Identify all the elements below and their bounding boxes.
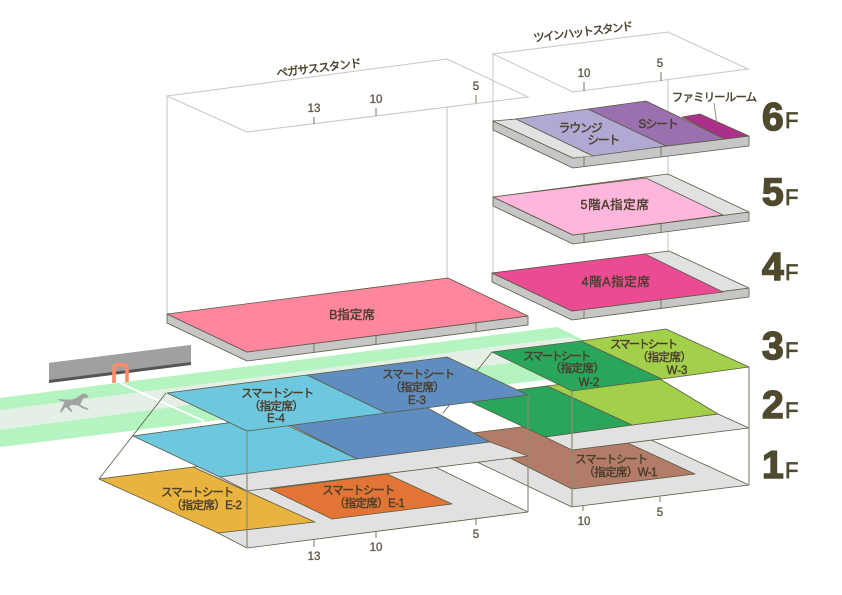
label: W-3: W-3 [667, 365, 687, 377]
icon: orange gate arch [114, 364, 127, 383]
East wing vertical edges [247, 395, 528, 548]
panel: West wing [440, 329, 749, 528]
floor label: 2F: F [785, 398, 798, 423]
S seat area [588, 101, 725, 146]
Twin Hat roof column ticks and numbers: 10 [578, 68, 590, 80]
icon: running horse [57, 394, 88, 412]
W-1 seat area [440, 420, 695, 489]
label: E-3 [382, 369, 454, 407]
Lounge seat area [516, 109, 666, 156]
W wing vertical edges [572, 367, 749, 507]
floor: 5F [493, 174, 749, 244]
blue seat area [270, 393, 490, 459]
label: E-1: （指定席）E-1 [334, 496, 404, 510]
floor: 6F: シート [587, 133, 619, 147]
Twin Hat stand label: ツインハットスタンド [533, 20, 634, 45]
panel: Twin Hat stand [492, 20, 757, 320]
label: W-2 [523, 351, 604, 389]
panel: East wing [99, 357, 528, 563]
floor: 6F: ラウンジ [558, 121, 603, 135]
floor label: 3F: F [785, 338, 798, 363]
label: E-1 [322, 485, 404, 510]
floor label: 5F: F [785, 185, 798, 210]
floor label: 5F [762, 171, 798, 214]
label: E-3: E-3 [408, 395, 426, 407]
label: E-4: （指定席） [249, 399, 303, 413]
Pegasus roof column ticks and numbers [308, 81, 479, 124]
floor label: 3F: 3 [762, 325, 784, 368]
label: E-4: E-4 [267, 413, 286, 425]
panel: Pegasus stand [167, 57, 528, 361]
Twin Hat stand roof outline [493, 32, 748, 92]
floor label: 4F: 4 [762, 246, 784, 289]
W wing column ticks and numbers: 5 [657, 507, 663, 519]
label: E-4: スマートシート [241, 388, 313, 400]
label: E-2: スマートシート [161, 487, 233, 499]
floor label: 6F: 6 [762, 96, 784, 139]
floor: 6F: Sシート [638, 117, 678, 131]
floor label: 4F [762, 246, 798, 289]
green seat area [460, 386, 632, 437]
label: E-3: （指定席） [390, 380, 444, 394]
W wing left trapezoid edge [443, 352, 492, 413]
Twin Hat roof column ticks and numbers: 5 [657, 58, 663, 70]
lime seat area [547, 373, 718, 425]
label: W-1 [575, 454, 657, 479]
E-1 seat area [270, 474, 452, 519]
floor: W 3F [492, 329, 749, 391]
W wing column ticks and numbers [578, 497, 663, 528]
label: W-1: （指定席）W-1 [583, 465, 657, 479]
label: W-2: スマートシート [523, 351, 590, 363]
floor: 6F [493, 101, 749, 168]
label: E-2 [161, 487, 241, 512]
light blue seat area [133, 417, 357, 477]
label: W-2: W-2 [579, 377, 599, 389]
floor: B reserved seats: B指定席 [329, 307, 375, 322]
label: W-2: （指定席） [550, 361, 604, 375]
label: E-1: スマートシート [322, 485, 394, 497]
floor: B reserved seats [167, 278, 528, 361]
floor label: 4F: F [785, 260, 798, 285]
Family room label and leader: ファミリールーム [672, 91, 757, 104]
Pegasus roof column ticks and numbers: 5 [473, 81, 479, 93]
floor: W 1F [440, 420, 749, 507]
white line from gate [120, 383, 204, 421]
East wing column ticks and numbers [308, 519, 479, 563]
label: W-3 [610, 339, 691, 377]
label: E-4 [241, 388, 313, 425]
East wing column ticks and numbers: 10 [370, 542, 382, 554]
Family room area [682, 114, 749, 139]
label: W-3: （指定席） [637, 350, 691, 364]
floor: 4F: 4階A指定席 [582, 274, 650, 289]
floor: 4F [492, 251, 749, 320]
E-2 seat area [99, 467, 315, 533]
floor label: 1F: 1 [762, 444, 784, 487]
panel: grandstand gate building [49, 345, 191, 383]
floor label: 2F: 2 [762, 384, 784, 427]
W wing column ticks and numbers: 10 [578, 516, 590, 528]
floor label: 6F: F [785, 108, 798, 133]
Pegasus roof column ticks and numbers: 13 [308, 103, 320, 115]
Family room label and leader [672, 91, 757, 125]
label: W-3: スマートシート [610, 339, 677, 351]
label: E-2: （指定席）E-2 [171, 498, 241, 512]
Pegasus roof column ticks and numbers: 10 [370, 94, 382, 106]
Twin Hat roof column ticks and numbers [578, 58, 663, 91]
floor label: 3F [762, 325, 798, 368]
floor label: 5F: 5 [762, 171, 784, 214]
label: W-1: スマートシート [575, 454, 647, 466]
East wing left trapezoid edge [99, 393, 166, 479]
Pegasus stand label: ペガサススタンド [276, 57, 362, 80]
floor label: 6F [762, 96, 798, 139]
floor label: 2F [762, 384, 798, 427]
floor label: 1F: F [785, 458, 798, 483]
floor: E 2F [133, 393, 528, 491]
East wing column ticks and numbers: 5 [473, 529, 479, 541]
East wing column ticks and numbers: 13 [308, 551, 320, 563]
label: E-3: スマートシート [382, 369, 454, 381]
floor: 5F: 5階A指定席 [581, 197, 649, 212]
floor: W 2F [460, 373, 749, 450]
floor: E 3F [167, 357, 528, 431]
race track [0, 327, 640, 447]
Pegasus stand roof outline [167, 59, 528, 132]
floor: E 1F [99, 450, 528, 548]
floor label: 1F [762, 444, 798, 487]
